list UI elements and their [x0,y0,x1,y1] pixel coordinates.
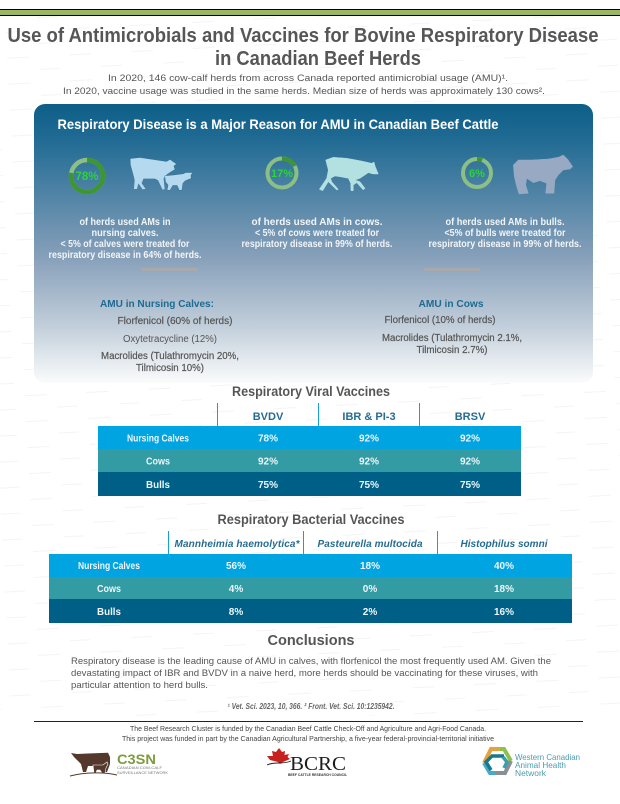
text: bulls stat: <5% of bulls were treated for [444,228,566,239]
text: bulls stat [428,217,582,250]
text: conclusions body: devastating impact of IBR and BVDV in a naive herd, more herds should be vaccinating for these viruses, with [71,668,538,679]
table: viral vaccines: Nursing Calves [127,434,189,444]
logo: C3SN: C3SN [117,751,156,767]
text: AMU in cows [382,298,522,356]
text: cows stat: of herds used AMs in cows. [252,217,383,228]
donut: 6%: 6% [469,168,485,180]
text: AMU in cows: AMU in Cows [418,298,484,310]
table: viral vaccines: 78% [258,434,278,444]
table: bacterial vaccines: 4% [229,584,243,595]
table: viral vaccines: 92% [258,456,278,468]
table: bacterial vaccines: Nursing Calves [78,561,140,572]
logo: C3SN: CANADIAN COW-CALF [117,766,163,770]
table: bacterial vaccines: 40% [494,561,514,572]
table: bacterial vaccines: Histophilus somni [460,539,548,550]
footer rule [34,721,583,722]
text: AMU in nursing calves: Macrolides (Tulathromycin 20%, [101,351,239,362]
table: bacterial vaccines: Mannheimia haemolytica* [174,539,301,550]
logo: Western Canadian Animal Health Network: Network [515,768,547,778]
donut: 17%: 17% [271,168,293,180]
title: in Canadian Beef Herds [215,48,421,70]
funding text: The Beef Research Cluster is funded by the Canadian Beef Cattle Check-Off and Agriculture and Agri-Food Canada. [130,724,486,733]
table: viral vaccines: IBR & PI-3 [342,411,396,423]
text: nursing calves stat: of herds used AMs in [80,217,170,228]
text: AMU in cows: Florfenicol (10% of herds) [384,315,496,326]
table: viral vaccines: BRSV [455,411,486,423]
funding text: This project was funded in part by the Canadian Agricultural Partnership, a five-year federal-provincial-territorial initiative [122,734,494,743]
table: bacterial vaccines: 18% [494,584,514,595]
table: viral vaccines: 92% [359,434,379,444]
table: viral vaccines: 75% [258,480,278,491]
divider right [424,268,480,271]
text: conclusions body: Respiratory disease is the leading cause of AMU in calves, with florfenicol the most frequently used AM. Given the [71,656,551,667]
footnote references: ¹ Vet. Sci. 2023, 10, 366. ² Front. Vet. Sci. 10:1235942. [228,702,394,711]
text: AMU in nursing calves: Oxytetracycline (12%) [123,334,217,345]
title [8,25,598,70]
table: bacterial vaccines [49,531,572,623]
logo: C3SN [70,751,168,776]
intro text [63,73,545,97]
logo: Western Canadian Animal Health Network: Animal Health [515,760,566,770]
text: AMU in nursing calves: AMU in Nursing Calves: [100,298,214,310]
text: bulls stat: of herds used AMs in bulls. [446,217,565,228]
divider left [142,268,198,271]
table: bacterial vaccines: 56% [226,561,246,572]
table: bacterial vaccines: Cows [97,584,121,595]
table: bacterial vaccines: 16% [494,607,514,618]
text: AMU in nursing calves: Tilmicosin 10%) [136,363,204,374]
table: bacterial vaccines: 0% [363,584,377,595]
table: viral vaccines: Cows [146,456,170,468]
logo: BCRC: BEEF CATTLE RESEARCH COUNCIL [288,773,348,777]
text: bulls stat: respiratory disease in 99% of herds. [428,239,582,250]
donut: 78%: 78% [75,171,99,183]
top green banner [0,9,620,16]
text: cows stat: respiratory disease in 99% of herds. [242,239,393,250]
text: cows stat: < 5% of cows were treated for [255,228,379,239]
text: AMU in nursing calves: Florfenicol (60% of herds) [118,316,232,327]
table: bacterial vaccines: 8% [229,607,243,618]
table: viral vaccines: 92% [460,456,480,468]
text: AMU in cows: Macrolides (Tulathromycin 2.1%, [382,333,522,344]
table: viral vaccines: 75% [460,480,480,491]
table: viral vaccines: BVDV [253,411,284,423]
heading: conclusions: Conclusions [267,633,355,649]
panel: respiratory disease and AMU [34,104,593,383]
donut: 17% [268,158,296,188]
table: viral vaccines: Bulls [146,480,170,491]
text: nursing calves stat: < 5% of calves were treated for [60,239,190,250]
table: bacterial vaccines: Bulls [97,607,121,618]
intro text: In 2020, 146 cow-calf herds from across Canada reported antimicrobial usage (AMU)¹. [108,73,508,84]
text: AMU in nursing calves [100,298,239,374]
text: conclusions body [71,656,551,691]
table: bacterial vaccines: 2% [363,607,377,618]
donut: 6% [463,159,491,187]
text: nursing calves stat: nursing calves. [92,228,159,239]
logo: Western Canadian Animal Health Network [484,749,580,778]
icon: bull [513,155,573,194]
intro text: In 2020, vaccine usage was studied in the same herds. Median size of herds was approximately 130 cows². [63,86,545,97]
logo: C3SN: SURVEILLANCE NETWORK [117,771,168,775]
table: viral vaccines [98,403,521,496]
icon: cow [319,157,378,191]
table: bacterial vaccines: 18% [360,561,380,572]
logo: Western Canadian Animal Health Network: Western Canadian [515,752,580,762]
table: viral vaccines: 92% [359,456,379,468]
panel heading: Respiratory Disease is a Major Reason for AMU in Canadian Beef Cattle [58,116,499,132]
icon: cow and calf [131,158,192,190]
text: conclusions body: particular attention to herd bulls. [71,680,208,691]
text: AMU in cows: Tilmicosin 2.7%) [416,345,488,356]
funding text [122,724,494,743]
table: bacterial vaccines: Pasteurella multocida [318,539,423,550]
heading: bacterial vaccines: Respiratory Bacterial Vaccines [218,512,404,527]
logo: BCRC: BCRC [290,753,346,775]
table: viral vaccines: 92% [460,434,480,444]
text: nursing calves stat [48,217,202,261]
text: nursing calves stat: respiratory disease in 64% of herds. [48,250,202,261]
logo: BCRC [267,748,348,777]
text: cows stat [242,217,393,250]
heading: viral vaccines: Respiratory Viral Vaccines [232,384,390,399]
donut: 78% [71,160,103,192]
table: viral vaccines: 75% [359,480,379,491]
